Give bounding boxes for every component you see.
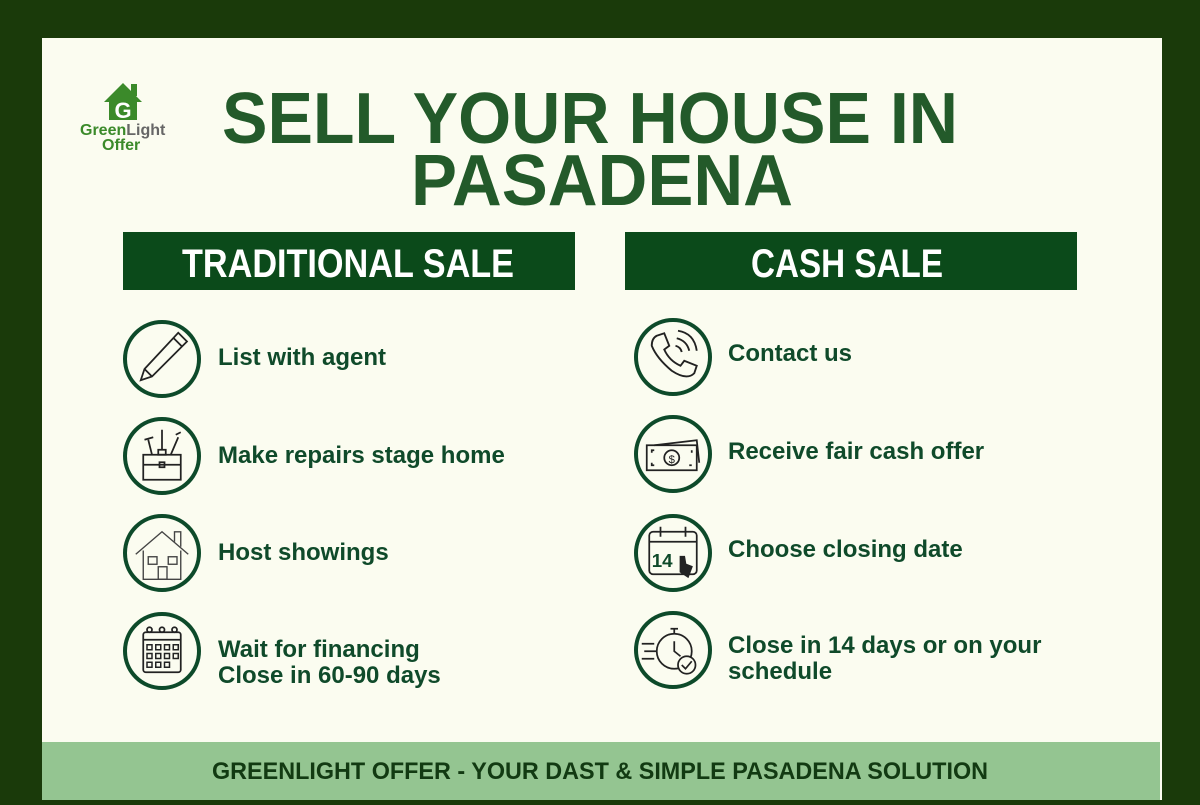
text: choose closing date: Choose closing date	[728, 536, 963, 563]
header: cash sale	[625, 232, 1077, 290]
icon: calendar	[123, 612, 201, 690]
header: cash sale: CASH SALE	[751, 242, 943, 286]
logo	[80, 83, 166, 152]
text: receive offer: Receive fair cash offer	[728, 438, 984, 465]
text: close in 14 days	[728, 632, 1042, 685]
icon: cash	[634, 415, 712, 493]
text: close in 14 days: Close in 14 days or on your	[728, 632, 1041, 659]
text: wait for financing: Close in 60-90 days	[218, 662, 441, 689]
header: traditional sale	[123, 232, 575, 290]
text: list with agent: List with agent	[218, 344, 386, 371]
text: host showings: Host showings	[218, 539, 389, 566]
text: make repairs: Make repairs stage home	[218, 442, 505, 469]
footer band: GREENLIGHT OFFER - YOUR DAST & SIMPLE PASADENA SOLUTION	[212, 758, 988, 785]
icon: calendar 14	[634, 514, 712, 592]
icon: toolbox	[123, 417, 201, 495]
text: close in 14 days: schedule	[728, 658, 832, 685]
icon: cash: $	[669, 454, 676, 466]
logo: G	[114, 98, 132, 123]
text: contact us: Contact us	[728, 340, 852, 367]
text: wait for financing: Wait for financing	[218, 636, 420, 663]
text: wait for financing	[218, 636, 441, 689]
icon: phone	[634, 318, 712, 396]
title	[222, 80, 958, 215]
icon: calendar 14: 14	[652, 550, 673, 571]
icon: house	[123, 514, 201, 592]
logo: GreenLight	[80, 122, 166, 139]
footer band	[42, 742, 1160, 800]
header: traditional sale: TRADITIONAL SALE	[182, 242, 514, 286]
icon: pencil	[123, 320, 201, 398]
title: SELL YOUR HOUSE IN	[222, 80, 958, 159]
icon: stopwatch	[634, 611, 712, 689]
